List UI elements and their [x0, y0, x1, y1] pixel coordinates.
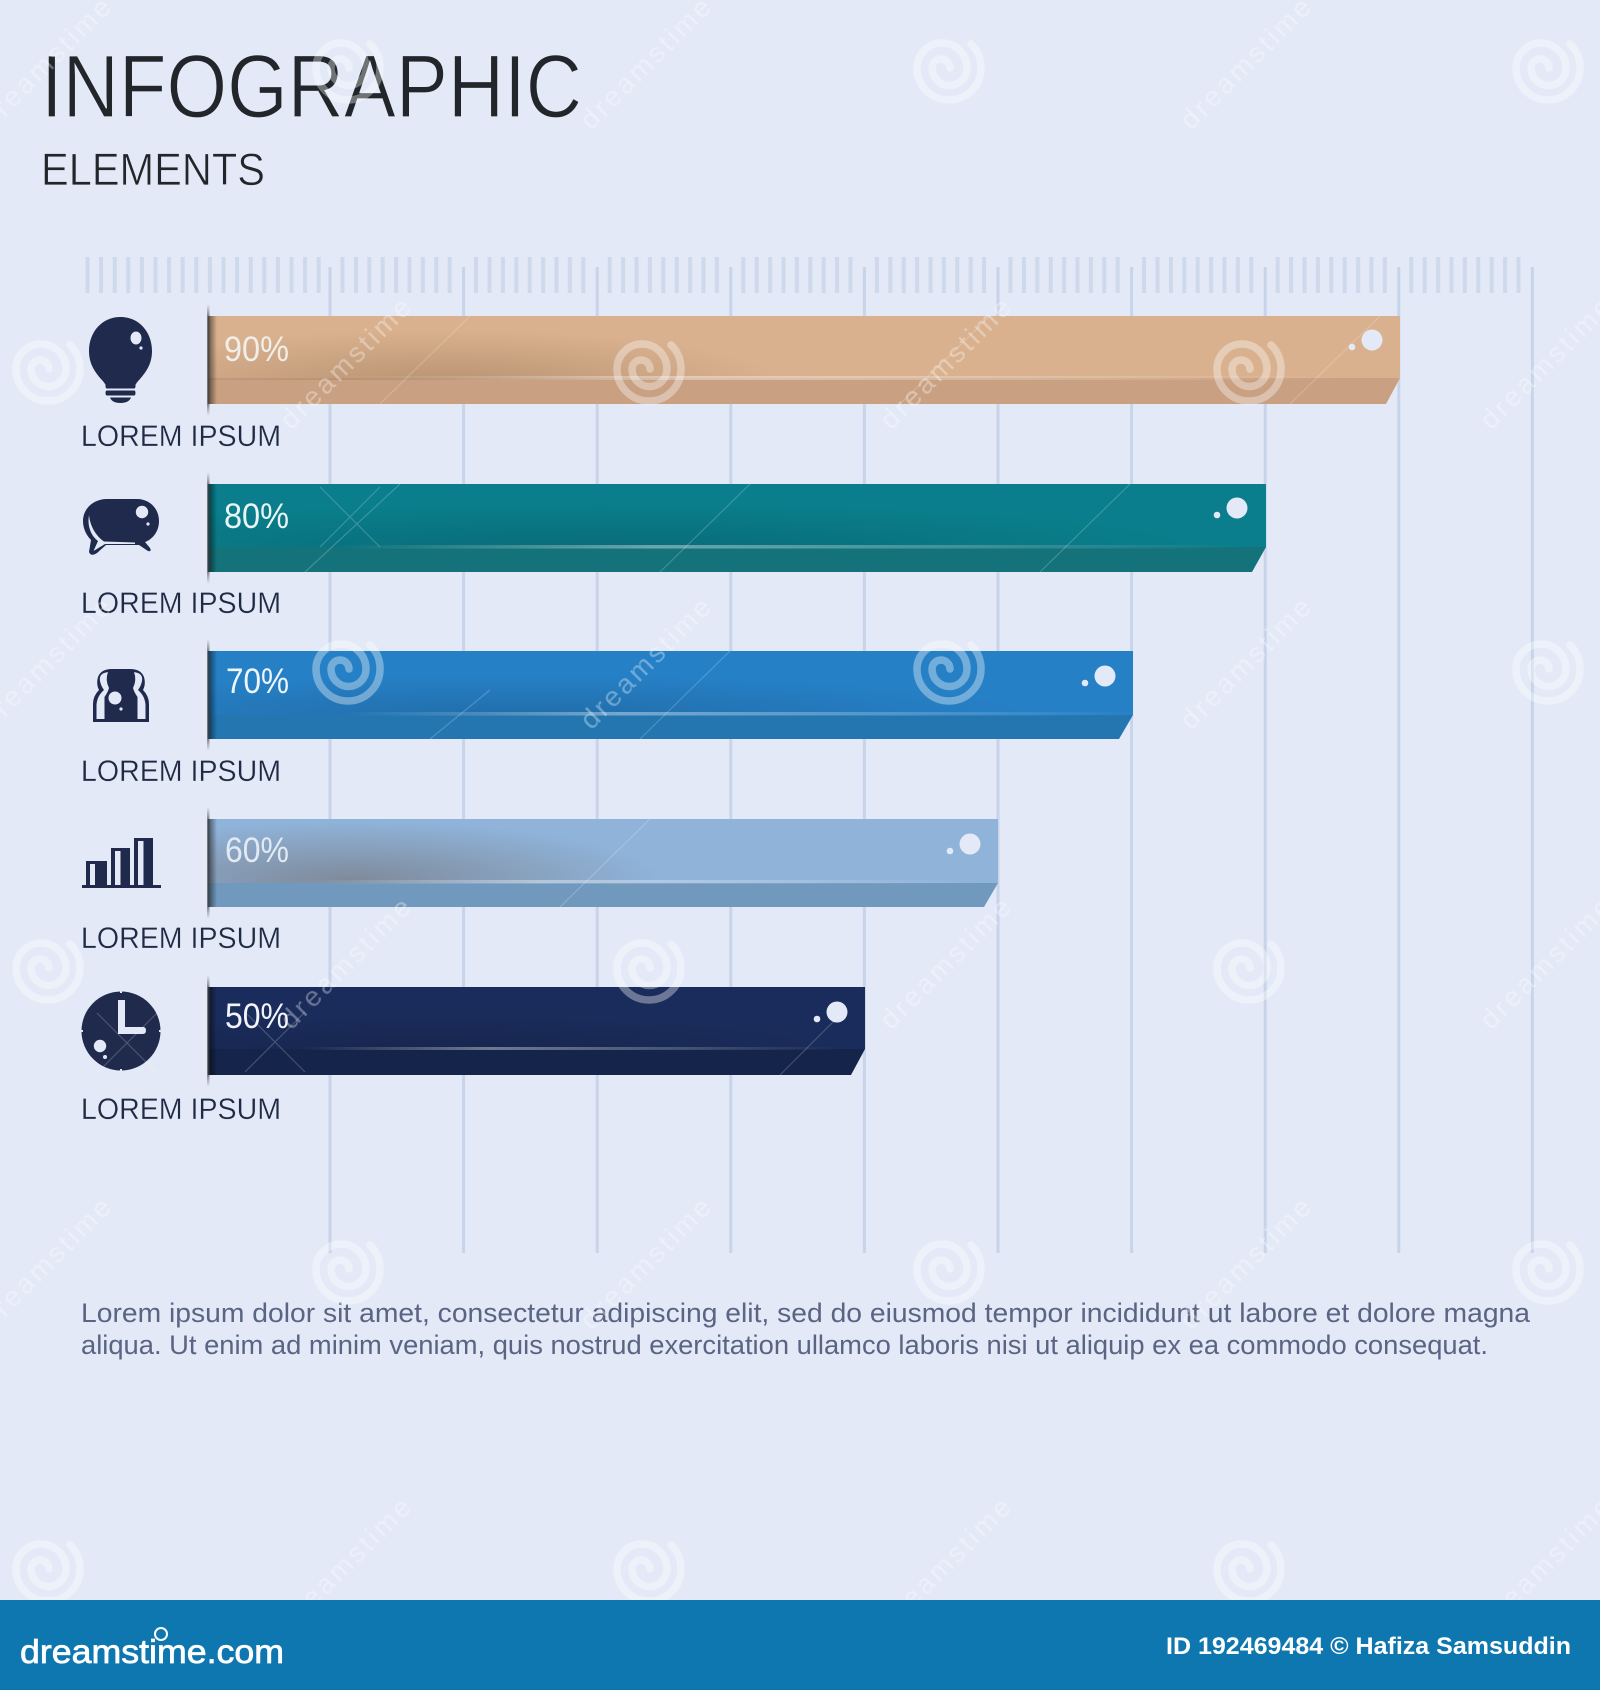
watermark text: dreamstime — [874, 1492, 1017, 1635]
label 3: LOREM IPSUM — [81, 755, 281, 788]
watermark text: dreamstime — [874, 892, 1017, 1035]
vertical grid lines — [330, 267, 1532, 1253]
value 50%: 50% — [225, 997, 289, 1036]
row 1: 90% — [81, 304, 1400, 453]
label 5: LOREM IPSUM — [81, 1093, 281, 1126]
label 4: LOREM IPSUM — [81, 922, 281, 955]
watermark text: dreamstime — [274, 892, 417, 1035]
label 2: LOREM IPSUM — [81, 587, 281, 620]
watermark text: dreamstime — [274, 292, 417, 435]
label 1: LOREM IPSUM — [81, 420, 281, 453]
watermark text: dreamstime — [274, 1492, 417, 1635]
watermark text: dreamstime — [574, 592, 717, 735]
watermark text: dreamstime — [1174, 1192, 1317, 1335]
icon: light bulb — [89, 317, 152, 403]
row 2: 80% — [83, 473, 1266, 614]
body paragraph: Lorem ipsum dolor sit amet, consectetur adipiscing elit, sed do eiusmod tempor incididunt ut labore et dolore magna — [81, 1298, 1531, 1328]
row 4: 60% — [40, 807, 998, 955]
watermark cross lines — [97, 316, 1380, 1075]
subtitle: ELEMENTS — [41, 144, 265, 195]
watermark text: dreamstime — [574, 1192, 717, 1335]
bar 50% — [207, 976, 865, 1086]
value 60%: 60% — [225, 831, 289, 870]
ruler ticks — [88, 257, 1533, 293]
footer credit: ID 192469484 © Hafiza Samsuddin — [1166, 1633, 1571, 1660]
watermark text: dreamstime — [874, 292, 1017, 435]
footer band — [0, 1600, 1600, 1690]
icon: speech bubble — [83, 499, 159, 555]
value 80%: 80% — [224, 497, 289, 536]
bar 70% — [207, 640, 1133, 750]
bar 80% — [207, 473, 1266, 583]
bar 60% — [207, 808, 998, 918]
title: INFOGRAPHIC — [41, 36, 582, 136]
body paragraph — [81, 1298, 1531, 1360]
value 70%: 70% — [226, 662, 289, 701]
body paragraph: aliqua. Ut enim ad minim veniam, quis nostrud exercitation ullamco laboris nisi ut aliquip ex ea commodo consequat. — [81, 1330, 1488, 1360]
watermark text: dreamstime — [1174, 592, 1317, 735]
icon: people — [93, 669, 149, 722]
value 90%: 90% — [224, 330, 289, 369]
row 5: 50% — [82, 976, 865, 1120]
icon: bar chart — [82, 838, 161, 888]
bar 90% — [207, 305, 1400, 415]
row 3: 70% — [83, 640, 1133, 782]
icon: clock — [80, 990, 162, 1072]
footer logo: dreamstime.com — [20, 1633, 284, 1670]
